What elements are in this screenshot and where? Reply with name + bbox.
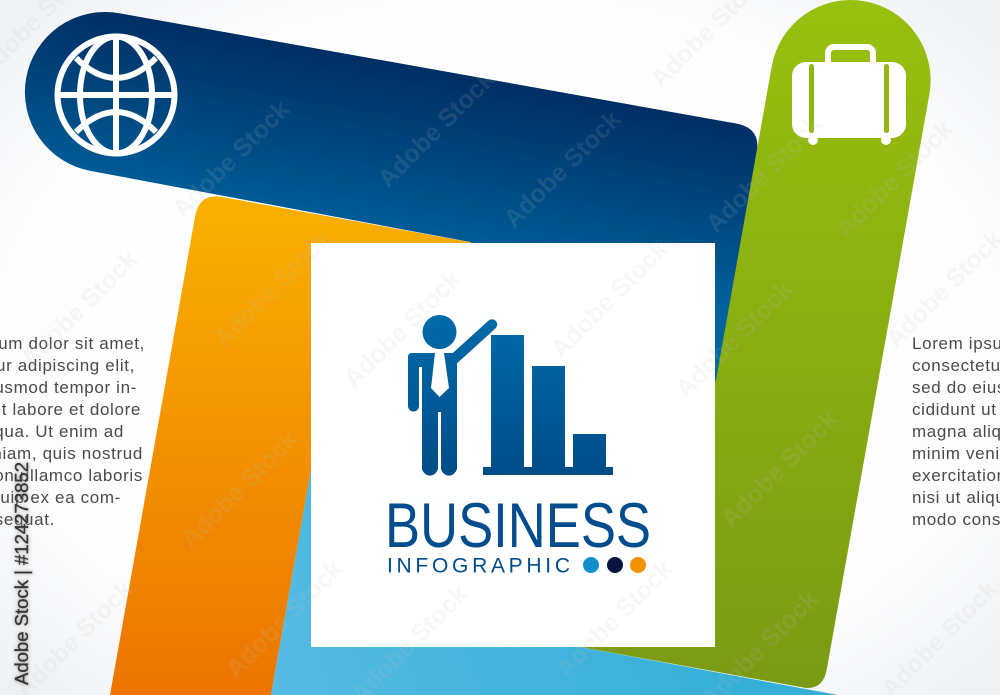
icon: businessman pointing at chart	[408, 315, 492, 476]
watermark pattern: Adobe Stock	[220, 555, 348, 683]
watermark pattern: Adobe Stock	[167, 95, 295, 223]
band: green	[575, 0, 931, 688]
watermark pattern: Adobe Stock	[830, 115, 958, 243]
band: navy	[25, 12, 757, 390]
heading: business: BUSINESS	[385, 491, 651, 561]
watermark pattern: Adobe Stock	[550, 555, 678, 683]
subheading: infographic: INFOGRAPHIC	[387, 554, 570, 578]
bar chart	[483, 335, 613, 475]
watermark pattern: Adobe Stock	[715, 405, 843, 533]
band: orange	[110, 196, 480, 695]
watermark pattern: Adobe Stock	[15, 245, 143, 373]
icon: briefcase	[792, 47, 906, 145]
band: light blue	[271, 470, 838, 695]
watermark pattern: Adobe Stock	[338, 265, 466, 393]
watermark pattern: Adobe Stock	[208, 225, 336, 353]
watermark: vertical stock id: Adobe Stock | #124273852	[12, 462, 32, 685]
icon: globe	[58, 36, 174, 154]
watermark pattern: Adobe Stock	[545, 235, 673, 363]
panel: central white card	[311, 243, 715, 647]
text block: left	[0, 334, 145, 529]
colour dots	[583, 557, 646, 573]
watermark pattern: Adobe Stock	[700, 110, 828, 238]
watermark pattern: Adobe Stock	[175, 425, 303, 553]
watermark pattern: Adobe Stock	[670, 275, 798, 403]
watermark pattern: Adobe Stock	[372, 65, 500, 193]
text block: right	[912, 334, 1000, 529]
watermark pattern: Adobe Stock	[498, 105, 626, 233]
